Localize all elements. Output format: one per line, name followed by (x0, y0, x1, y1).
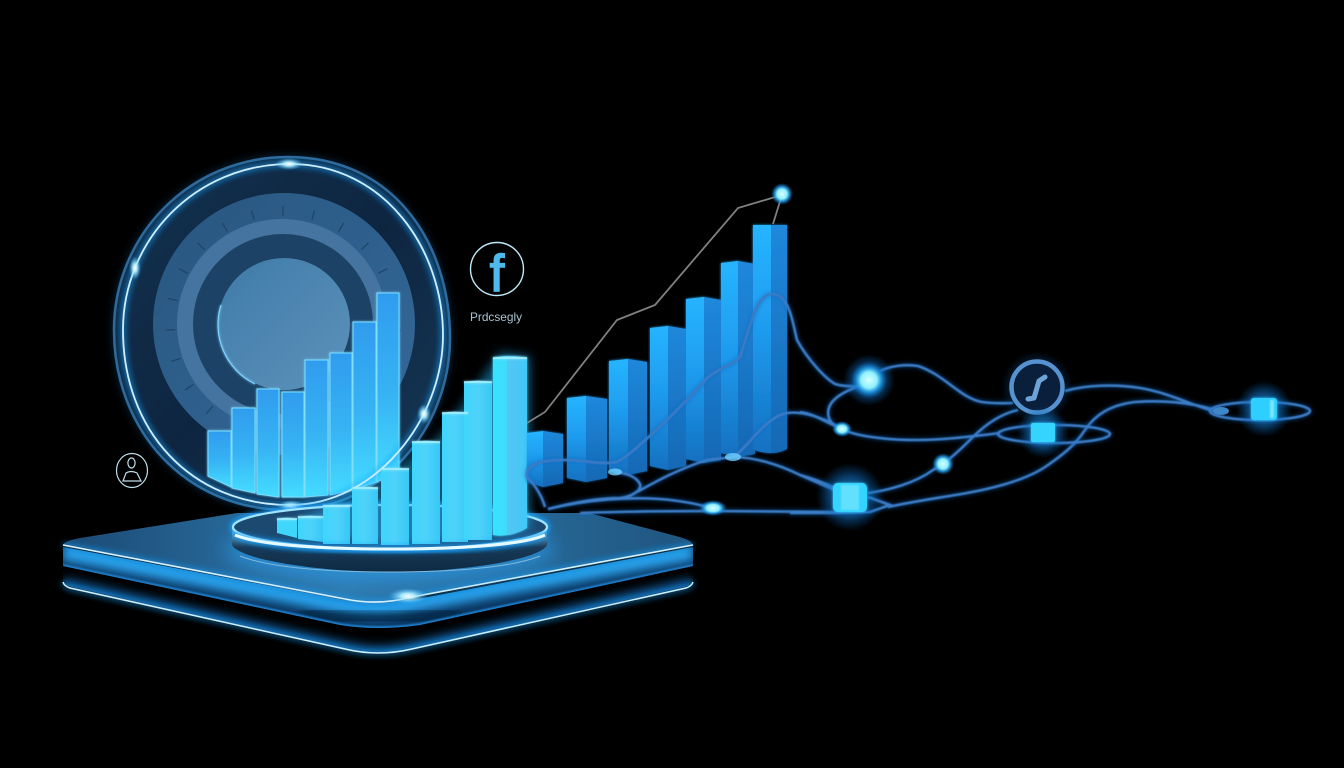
platform: top surface (63, 513, 693, 602)
bar 2 (232, 408, 255, 493)
right bar 7 (753, 225, 787, 453)
bar 8 (377, 293, 399, 482)
gauge: glass band (114, 157, 450, 510)
bar 1 (208, 431, 231, 487)
node: cube under music circle (998, 406, 1110, 458)
gauge: tick disc (153, 193, 415, 455)
gauge: outer halo (114, 157, 450, 510)
front bar 4 (352, 486, 378, 544)
node: small on lower line (699, 500, 727, 516)
platform (60, 513, 700, 653)
bar 4 (282, 392, 304, 497)
gauge: tick marks (165, 206, 401, 414)
back bar chart (208, 293, 399, 497)
front bar 2 (298, 516, 323, 542)
right bar 5 (686, 297, 721, 463)
right bar chart (527, 225, 787, 487)
network curves (527, 294, 1217, 513)
node: end cube (1210, 381, 1310, 437)
ring flare top (275, 158, 303, 170)
icon: facebook badge: f (490, 245, 505, 303)
front bars: cyan glow (280, 352, 530, 546)
label: under facebook badge: Prdcsegly (470, 310, 522, 324)
icon: facebook badge (470, 242, 524, 303)
ring flare right (417, 404, 431, 424)
bright gauge ring (123, 158, 443, 512)
front bar 7 (442, 412, 468, 542)
bar 3 (257, 389, 279, 497)
bar 7 (353, 322, 376, 490)
platform: bright flare (388, 588, 428, 604)
front bars: top highlights (277, 358, 527, 519)
bar 6 (330, 353, 352, 495)
node: music circle (1001, 351, 1073, 423)
front bar 9 (493, 356, 527, 536)
platform: lower plate (63, 585, 693, 653)
base ring front edge (235, 535, 545, 549)
right bar 2 (567, 396, 607, 482)
base ring: side wall (232, 527, 547, 572)
front bar 6 (412, 440, 440, 544)
front bar 1 (277, 518, 297, 538)
gauge: centre disc (218, 258, 350, 390)
node: small on bars (725, 453, 741, 461)
circular gauge (114, 157, 450, 510)
right bar 1 (527, 431, 563, 487)
node: large glow A (843, 354, 895, 406)
node: cube B (816, 463, 884, 531)
gauge: light ring (177, 219, 387, 429)
front bar 3 (323, 504, 350, 544)
ring flare left (129, 256, 141, 280)
gauge: dark ring (193, 234, 373, 414)
right bar 3 (609, 359, 647, 475)
platform: middle plate (63, 547, 693, 628)
node: small A (832, 421, 852, 437)
bar 5 (305, 360, 328, 497)
icon: music note (1028, 377, 1045, 399)
node: top of trend line (771, 183, 793, 205)
right bar 4 (650, 326, 686, 470)
icon: person badge (116, 454, 148, 488)
base ring (225, 505, 555, 580)
node: small B (932, 453, 954, 475)
ring flare bottom (277, 500, 305, 512)
gray trend line (527, 195, 782, 423)
base ring: glow (225, 520, 555, 580)
base ring: top ellipse (233, 505, 547, 549)
right bar 6 (721, 261, 755, 457)
node: small near bar 3 (608, 468, 622, 476)
front bar chart (277, 352, 530, 546)
front bar 8 (464, 380, 492, 540)
front bar 5 (381, 468, 409, 545)
